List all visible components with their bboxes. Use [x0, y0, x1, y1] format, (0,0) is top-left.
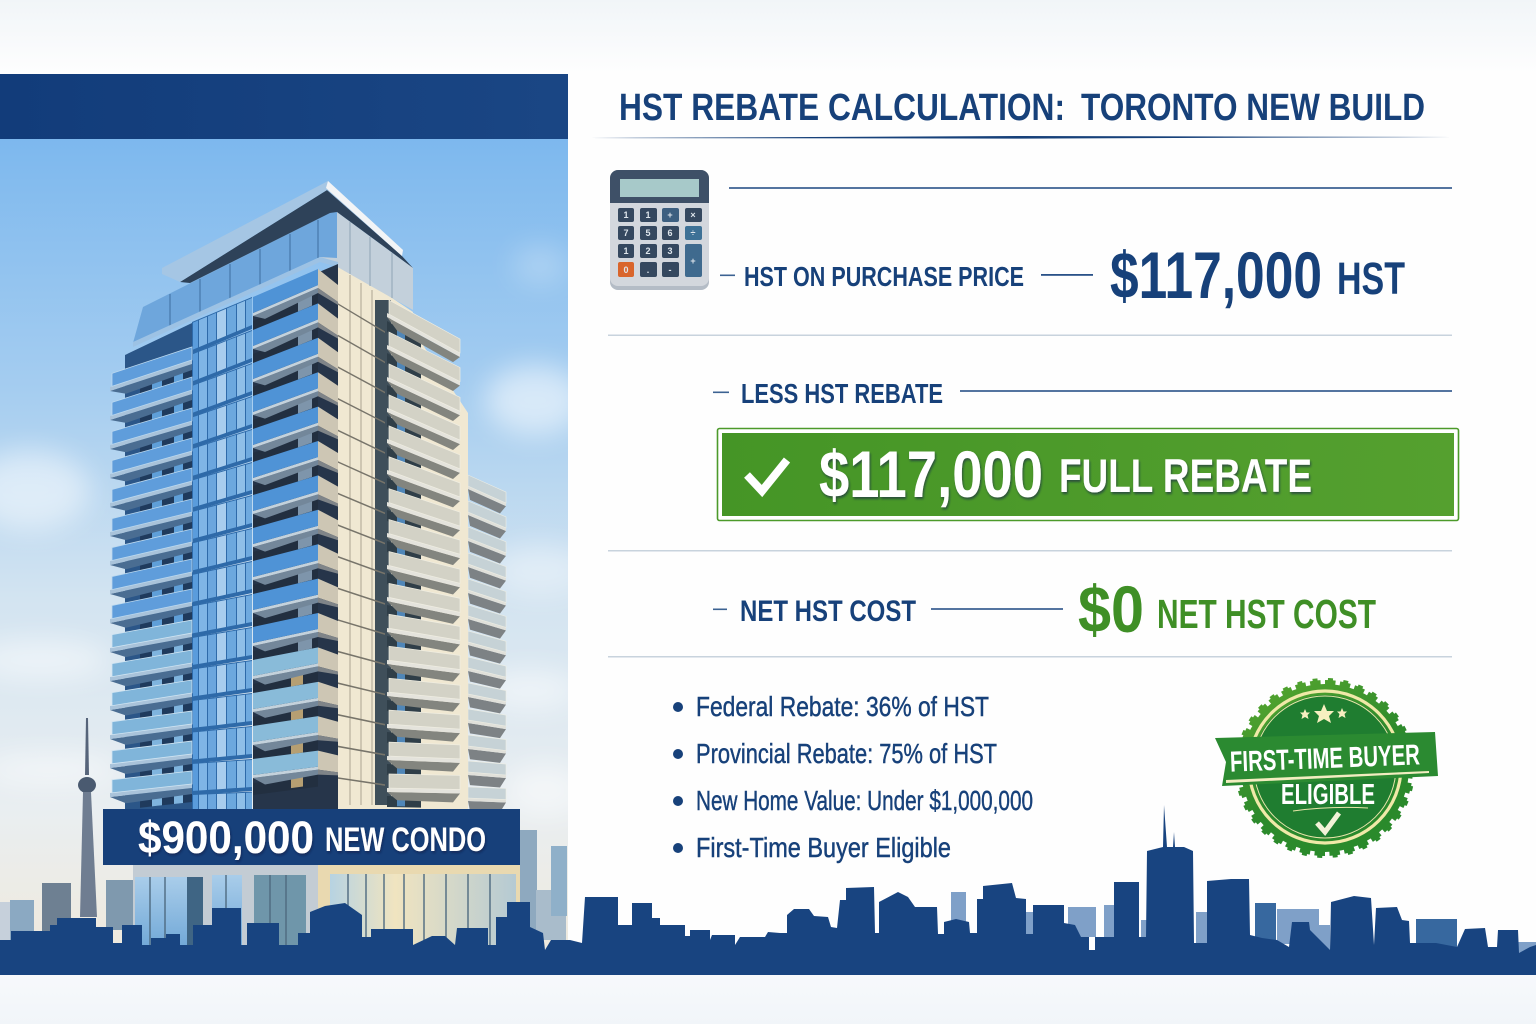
icon: calculator: + — [667, 210, 673, 220]
green rebate box: $117,000 — [819, 437, 1043, 511]
bullet list: First-Time Buyer Eligible — [696, 832, 951, 863]
icon: calculator: - — [668, 265, 672, 275]
icon: calculator: 0 — [623, 265, 629, 275]
clouds — [0, 245, 590, 815]
green rebate box — [718, 428, 1458, 520]
icon: calculator: 5 — [645, 228, 651, 238]
row: less HST rebate: LESS HST REBATE — [741, 378, 943, 409]
row: net HST cost — [713, 572, 1376, 646]
bullet list: New Home Value: Under $1,000,000 — [696, 785, 1033, 816]
skyline: lighter buildings — [951, 892, 1536, 954]
badge: first-time buyer eligible — [1215, 680, 1438, 856]
panel: condo photo — [0, 139, 590, 975]
icon: calculator — [610, 170, 709, 290]
window mullions — [350, 275, 372, 805]
crown and roof — [133, 181, 413, 347]
icon: calculator: 2 — [645, 246, 651, 256]
title underline — [590, 136, 1452, 139]
bullet list — [673, 691, 1033, 863]
icon: calculator: 6 — [667, 228, 673, 238]
title: HST REBATE CALCULATION: — [619, 87, 1065, 129]
skyline: mid-tone buildings — [1255, 903, 1457, 949]
icon: check mark — [747, 460, 787, 491]
row: net HST cost: NET HST COST — [740, 595, 916, 628]
row: HST on purchase price: $117,000 — [1110, 238, 1322, 312]
white gutter behind skyline — [568, 139, 586, 939]
dark recess — [375, 300, 391, 805]
core walls — [125, 323, 192, 810]
price banner: $900,000 — [138, 812, 314, 863]
building — [110, 181, 506, 826]
top rule — [729, 187, 1452, 189]
cream body — [338, 262, 468, 810]
icon: CN Tower — [78, 718, 97, 917]
ribbon — [1215, 732, 1438, 786]
skyline — [0, 805, 1536, 975]
left balconies — [110, 347, 192, 811]
badge: first-time buyer eligible: ELIGIBLE — [1281, 779, 1375, 811]
icon: calculator: 3 — [667, 246, 673, 256]
icon: calculator: ÷ — [691, 228, 696, 238]
badge: first-time buyer eligible: FIRST-TIME BUYER — [1229, 739, 1421, 779]
skyline: navy silhouette — [0, 805, 1536, 975]
title — [619, 87, 1425, 129]
right balconies — [387, 299, 460, 808]
middle balconies — [253, 269, 338, 795]
price banner: NEW CONDO — [325, 821, 486, 859]
row: HST on purchase price: HST ON PURCHASE PRICE — [744, 261, 1024, 292]
icon: calculator: 1 — [645, 210, 651, 220]
podium — [133, 865, 520, 952]
price banner — [103, 809, 520, 865]
row: net HST cost: $0 — [1078, 572, 1144, 646]
row: HST on purchase price: HST — [1337, 253, 1405, 304]
title: TORONTO NEW BUILD — [1081, 87, 1425, 129]
icon: calculator: × — [690, 210, 696, 220]
distant skyline — [0, 830, 567, 942]
central glass column — [192, 297, 252, 826]
header band — [0, 74, 568, 139]
icon: calculator: + — [690, 256, 696, 266]
bullet list: Provincial Rebate: 75% of HST — [696, 738, 997, 769]
rear balconies — [468, 475, 506, 813]
icon: calculator: 1 — [623, 210, 629, 220]
icon: calculator: . — [647, 265, 649, 275]
bullet list: Federal Rebate: 36% of HST — [696, 691, 989, 722]
icon: badge check — [1317, 813, 1339, 832]
row: HST on purchase price — [720, 238, 1405, 312]
green rebate box: FULL REBATE — [1059, 449, 1312, 502]
icon: calculator: 1 — [623, 246, 629, 256]
icon: calculator: 7 — [623, 228, 629, 238]
sky — [0, 139, 568, 975]
row: net HST cost: NET HST COST — [1157, 591, 1376, 637]
icon: stars — [1300, 704, 1347, 723]
